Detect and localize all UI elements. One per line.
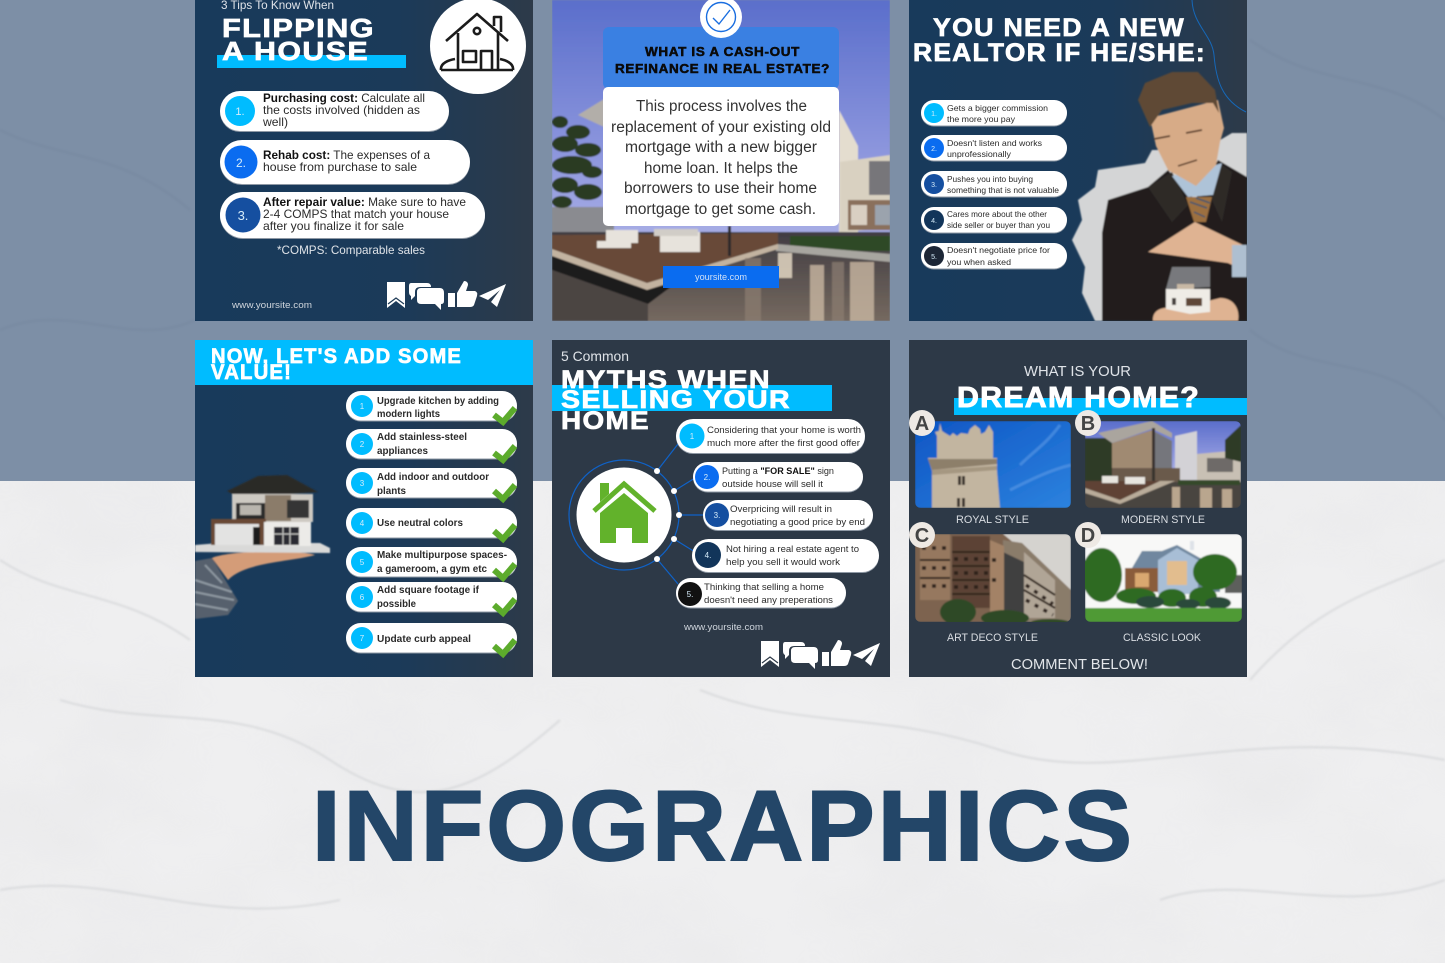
main title: INFOGRAPHICS [312, 770, 1135, 881]
list item 3 [346, 468, 517, 499]
badge A [909, 410, 935, 436]
icon: check [494, 525, 515, 539]
footnote: *COMPS: Comparable sales [277, 243, 425, 257]
list item 4: 4 [360, 519, 365, 528]
icons: save, comment, like, share [387, 281, 506, 310]
panel: dream home [909, 340, 1247, 677]
icon: check [494, 408, 515, 422]
panel: myths when selling [552, 340, 890, 677]
badge B [1075, 410, 1101, 436]
list item 2: appliances [377, 445, 428, 457]
heading: YOU NEED A NEW [933, 14, 1185, 42]
list item 3: Pushes you into buying [947, 174, 1033, 184]
myth 2: 2. [704, 473, 710, 482]
list item 3: After repair value: Make sure to have [263, 195, 466, 209]
list item 6: Add square footage if [377, 584, 479, 596]
panel: new realtor [909, 0, 1247, 321]
panel: cash-out refinance [552, 0, 890, 321]
website: www.yoursite.com [683, 622, 763, 633]
heading: WHAT IS A CASH-OUT [645, 45, 800, 59]
icons: save, comment, like, share [761, 640, 880, 669]
myth 4: Not hiring a real estate agent to [726, 544, 859, 555]
myth 1: 1 [690, 432, 695, 441]
list item 7: Update curb appeal [377, 633, 471, 645]
list item 4 [921, 207, 1067, 232]
badge A: A [915, 413, 929, 435]
list item 1: Upgrade kitchen by adding [377, 395, 499, 407]
photo D: classic look house [1082, 534, 1242, 622]
website button: yoursite.com [695, 272, 747, 283]
photo C: art deco buildings [915, 534, 1071, 627]
myth 2 [693, 462, 863, 492]
list item 3: 3. [931, 182, 937, 189]
caption: modern style: MODERN STYLE [1121, 514, 1205, 526]
caption: classic look: CLASSIC LOOK [1123, 632, 1202, 644]
header band [195, 340, 533, 385]
list item 2: 2 [360, 440, 365, 449]
badge C [909, 522, 935, 548]
badge D: D [1081, 525, 1095, 547]
list item 7: 7 [360, 634, 365, 643]
heading [914, 18, 1202, 62]
list item 3: Add indoor and outdoor [377, 471, 489, 483]
highlight bar [217, 55, 406, 68]
list item 3: plants [377, 485, 406, 497]
decorative curve [1192, 0, 1246, 112]
list item 3 [921, 171, 1067, 196]
heading [210, 348, 460, 380]
myth 5 [676, 578, 846, 608]
icon: check [494, 599, 515, 613]
heading: MYTHS WHEN [561, 366, 771, 394]
list item 5: 5. [931, 254, 937, 261]
highlight bar [552, 385, 832, 411]
heading: NOW, LET'S ADD SOME [211, 345, 462, 368]
subtitle: 5 Common [561, 348, 629, 364]
list item 4 [346, 508, 517, 539]
list item 1 [220, 91, 449, 131]
list item 2: Rehab cost: The expenses of a [263, 148, 430, 162]
list item 4: Cares more about the other [947, 209, 1047, 219]
list item 7 [346, 623, 517, 654]
myth 3 [703, 500, 873, 530]
icon: check [494, 446, 515, 460]
list item 1: well) [262, 115, 288, 129]
list item 3: 3. [238, 208, 248, 223]
hub connectors [569, 444, 704, 584]
list item 4: side seller or buyer than you [947, 220, 1050, 230]
list item 5 [346, 547, 517, 578]
list item 6: 6 [360, 593, 365, 602]
list item 1: Gets a bigger commission [947, 103, 1048, 113]
icon: green house [576, 468, 672, 562]
myth 2: Putting a "FOR SALE" sign [722, 466, 834, 477]
list item 5: Make multipurpose spaces- [377, 549, 507, 561]
heading: A HOUSE [222, 36, 369, 66]
panel: flipping a house [195, 0, 533, 321]
list item 2 [346, 429, 517, 460]
myth 1 [676, 419, 865, 453]
icon: check [494, 485, 515, 499]
list item 4: 4. [931, 218, 937, 225]
list item 6: possible [377, 598, 416, 610]
list item 1: the more you pay [947, 114, 1016, 124]
list item 2: house from purchase to sale [263, 160, 417, 174]
body text: replacement of your existing old [611, 119, 831, 136]
header box [603, 27, 839, 89]
list item 3: something that is not valuable [947, 185, 1059, 195]
badge D [1075, 522, 1101, 548]
list item 1: 1 [360, 402, 365, 411]
list item 5: Doesn't negotiate price for [947, 245, 1050, 255]
list item 6 [346, 582, 517, 613]
list item 5: you when asked [947, 257, 1011, 267]
myth 4: 4. [705, 551, 711, 560]
heading [222, 18, 372, 61]
myth 5: Thinking that selling a home [704, 582, 824, 593]
list item 1: modern lights [377, 408, 440, 420]
list item 3: 3 [360, 479, 365, 488]
myth 1: much more after the first good offer [707, 438, 860, 449]
myth 5: 5. [687, 590, 693, 599]
caption: royal style: ROYAL STYLE [956, 514, 1029, 526]
list item 2: 2. [931, 146, 937, 153]
caption: art deco style: ART DECO STYLE [947, 632, 1038, 644]
list item 5 [921, 243, 1067, 268]
body text: borrowers to use their home [624, 180, 817, 197]
myth 3: Overpricing will result in [730, 504, 832, 515]
list item 1: 1. [235, 106, 245, 118]
body text [611, 98, 831, 218]
heading: HOME [561, 407, 650, 435]
heading: DREAM HOME? [957, 382, 1200, 414]
heading: REALTOR IF HE/SHE: [913, 39, 1206, 67]
list item 1: 1. [931, 111, 937, 118]
list item 2 [921, 135, 1067, 160]
heading: VALUE! [211, 361, 292, 384]
badge B: B [1081, 413, 1095, 435]
website: www.yoursite.com [231, 300, 312, 311]
photo: torn paper and agent holding model house [1072, 72, 1247, 321]
icon: check badge [700, 0, 742, 38]
heading [561, 366, 791, 435]
connector dots [654, 468, 682, 562]
myth 4: help you sell it would work [726, 557, 840, 568]
myth 1: Considering that your home is worth [707, 425, 861, 436]
list item 3 [220, 192, 485, 238]
list item 3: 2-4 COMPS that match your house [263, 207, 449, 221]
badge C: C [915, 525, 929, 547]
myth 3: negotiating a good price by end [730, 517, 865, 528]
photo B: modern style house [1085, 421, 1241, 508]
heading [616, 46, 829, 74]
heading: SELLING YOUR [561, 386, 791, 414]
myth 2: outside house will sell it [722, 479, 823, 490]
myth 5: doesn't need any preperations [704, 595, 833, 606]
highlight bar [954, 398, 1247, 415]
list item 1 [346, 391, 517, 422]
body text: mortgage to get some cash. [625, 201, 816, 218]
icon: check [494, 564, 515, 578]
list item 1 [921, 100, 1067, 126]
myth 4 [692, 539, 879, 572]
list item 2: Doesn't listen and works [947, 138, 1042, 148]
body text: mortgage with a new bigger [625, 139, 817, 156]
list item 1: Purchasing cost: Calculate all [263, 91, 425, 105]
call to action: COMMENT BELOW! [1011, 657, 1148, 673]
list item 2: 2. [236, 156, 246, 170]
subtitle: WHAT IS YOUR [1024, 364, 1131, 380]
list item 4: Use neutral colors [377, 517, 463, 529]
panel: add some value [195, 340, 533, 677]
photo A: royal style tower [915, 421, 1071, 508]
body text: home loan. It helps the [644, 160, 798, 177]
body text: This process involves the [636, 98, 807, 115]
photo: model house on hand [195, 475, 330, 619]
icon: house badge [430, 0, 526, 94]
body box [603, 87, 839, 226]
myth 3: 3. [714, 511, 720, 520]
photo: modern house with pool [552, 0, 890, 321]
list item 5: 5 [360, 558, 365, 567]
list item 1: the costs involved (hidden as [263, 103, 420, 117]
list item 2: unprofessionally [947, 149, 1012, 159]
icon: check [494, 640, 515, 654]
list item 2: Add stainless-steel [377, 431, 467, 443]
list item 5: a gameroom, a gym etc [377, 563, 487, 575]
list item 3: after you finalize it for sale [263, 219, 404, 233]
list item 2 [220, 140, 470, 184]
website button [663, 266, 779, 288]
heading: REFINANCE IN REAL ESTATE? [615, 62, 830, 76]
heading: FLIPPING [222, 13, 375, 43]
